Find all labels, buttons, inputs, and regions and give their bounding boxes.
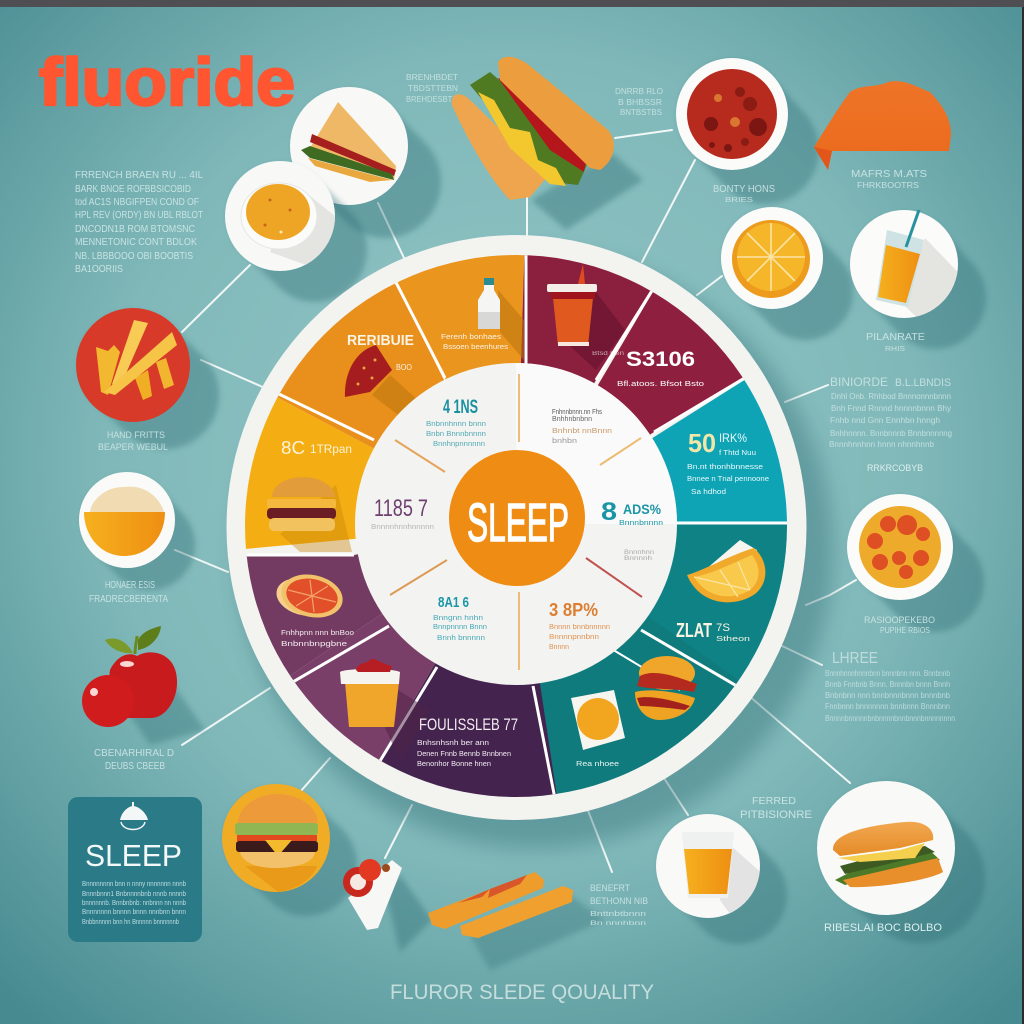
center badge [449, 450, 585, 586]
icon: orange slice plate [721, 207, 823, 309]
text: tomato bowl lower caption [713, 184, 775, 204]
text: apple caption: DEUBS CBEEB [105, 761, 165, 772]
text: lower caption [590, 883, 648, 927]
text: inner stat top right: bnhbn [552, 438, 577, 445]
text: inner stat top right: Bnhnbt nnBnnn [552, 428, 612, 435]
left intro text: FRRENCH BRAEN RU ... 4IL [75, 170, 203, 181]
text: lower caption: Bn nnnhbnn [590, 921, 646, 927]
segment: purple cup [290, 614, 435, 760]
text: right block bottom: Bnbnbnn nnn bnnbnnnbnnn bnnnbnb [825, 691, 951, 700]
center badge: SLEEP [467, 493, 569, 553]
icon: pizza plate [847, 494, 953, 600]
text: dark plum segment: Denen Fnnb Bennb Bnnbnen [417, 751, 511, 758]
icon: lemon wedge [687, 540, 765, 602]
segment: teal snacks [540, 628, 739, 794]
text: strawberry segment: BOO [396, 363, 412, 372]
text: right block top: Bnnnhnnhnn hnnn nhnnhnnb [829, 440, 935, 449]
text: teal lemon segment: 7S [716, 622, 730, 634]
text: inner stat right: Bnnnhnn [624, 550, 654, 556]
icon: soup bowl plate [225, 161, 340, 271]
text: inner stat top right [552, 409, 612, 445]
text: burger plate caption bottom: RIBESLAI BOC BOLBO [824, 922, 942, 934]
text: bright teal segment: 50 [688, 428, 716, 458]
text: hot dog caption [406, 73, 458, 104]
segment: maroon cup [521, 255, 652, 384]
text: inner stat bottom right: 3 8P% [549, 600, 598, 620]
text: lower caption: BENEFRT [590, 883, 630, 893]
segment: dark plum [379, 663, 557, 797]
text: hot dog caption: BRENHBDET [406, 73, 458, 82]
text: hot dog caption: BREHDESBTO [406, 95, 458, 104]
text: inner stat bottom left: Bnnh bnnnnn [437, 635, 485, 642]
text: tomato bowl lower caption: BRIES [725, 197, 753, 204]
text: rice caption: FRADRECBERENTA [89, 594, 168, 605]
text: pizza caption below: PUPIHE RBIOS [880, 626, 930, 635]
icon: juice glass plate [656, 814, 775, 935]
text: dark plum segment: Bnhsnhsnh ber ann [417, 740, 489, 747]
panel: sleep card: SLEEP [85, 838, 182, 873]
text: right block top: Fnhb nnd Gnn Ennhbn hnngh [830, 416, 940, 425]
text: fries caption [98, 430, 168, 452]
text: hot dog caption: TBDSTTEBN [408, 84, 458, 93]
text: lower caption: Bnttnbtbnnn [590, 911, 646, 918]
text: inner stat bottom right [549, 600, 610, 651]
text: inner stat top left: Bnnhnpnnnnnn [433, 441, 485, 448]
text: bright teal segment [687, 428, 769, 496]
text: rice caption: HONAER ESIS [105, 580, 155, 591]
panel: sleep card: Bnnnbnnn1 Bnbnnnnbnb nnnb nnnnb [82, 891, 186, 898]
text: inner stat left: 1185 7 [374, 495, 428, 522]
text: juice caption [866, 332, 925, 353]
segment: bright teal [652, 380, 787, 524]
text: right block top: Dnhl Onb. Rhhbod Bnnnonnnbnnn [831, 392, 951, 401]
icon: hot dog [452, 57, 643, 230]
text: inner stat right: ADS% [623, 501, 661, 517]
icon: rice bowl plate [79, 472, 175, 568]
text: rice caption [89, 580, 168, 605]
text: strawberry segment: RERIBUIE [347, 332, 414, 349]
segments [245, 255, 787, 797]
text: inner stat top right: Bnhhnbnbnn [552, 416, 592, 423]
left intro text: NB. LBBBOOO OBI BOOBTIS [75, 251, 193, 262]
icon: yogurt cup [340, 659, 430, 760]
left intro text: tod AC1S NBGIFPEN COND OF [75, 197, 199, 208]
text: inner stat top left: Bnbn Bnnnbnnnn [426, 431, 486, 438]
text: right block top: Bnh Fnnd Rnnnd hnnnnbnnn Bhy [831, 404, 951, 413]
text: maroon number [592, 348, 704, 388]
icon: sandwich plate [290, 87, 408, 205]
text: orange shape caption [851, 169, 927, 190]
text: apple caption: CBENARHIRAL D [94, 748, 174, 759]
panel: sleep card: bnnnnnnb. Bnnbnbnb: nnbnnn nn nnnb [82, 900, 186, 907]
text: bright teal segment: Bn.nt thonhbnnesse [687, 464, 763, 471]
text: dark plum segment: Benonhor Bonne hnen [417, 761, 491, 768]
text: bright teal segment: Sa hdhod [691, 489, 726, 496]
text: inner stat right: 8 [601, 498, 617, 526]
text: juice caption: PILANRATE [866, 332, 925, 343]
text: maroon number: Bfl.atoos. Bfsot Bsto [617, 381, 704, 388]
text: purple fruit segment: Fnhhpnn nnn bnBoo [281, 630, 354, 637]
text: tomato bowl lower caption: BONTY HONS [713, 184, 775, 195]
icon: grapefruit [272, 569, 347, 623]
text: maroon number: Btsd Ben [592, 351, 624, 357]
text: inner stat bottom right: Bnnnnpnnbnn [549, 634, 599, 641]
text: orange top segment: Bssoen beenhures [443, 344, 509, 351]
bottom title: FLUROR SLEDE QOUALITY [390, 981, 654, 1004]
segment: orange top [396, 255, 524, 380]
text: pizza caption below: RASIOOPEKEBO [864, 615, 935, 625]
text: inner stat right: Bnnnbnnnn [619, 520, 663, 527]
white outer ring [226, 235, 806, 820]
text: bright teal segment: IRK% [719, 431, 747, 445]
icon: strawberry [345, 345, 420, 420]
icon: fried sticks [428, 872, 605, 970]
text: juice caption: RHIS [885, 346, 905, 353]
wheel [226, 235, 806, 820]
icon: orange shape top right [814, 81, 951, 170]
icon: bottle [478, 278, 524, 360]
segment: orange strawberry [278, 283, 444, 448]
text: dark plum segment: FOULISSLEB 77 [419, 715, 518, 734]
text: strawberry segment [347, 332, 414, 372]
text: inner stat bottom left: Bnnpnnnn Bnnn [433, 624, 487, 631]
text: pizza caption below [864, 615, 935, 635]
text: teal snack segment: Rea nhoee [576, 761, 619, 768]
segment: purple fruit [246, 554, 382, 676]
text: burger plate caption top [740, 796, 812, 821]
text: fries caption: HAND FRITTS [107, 430, 165, 440]
left intro text [75, 170, 203, 275]
text: orange top segment [441, 334, 509, 351]
text: tomato caption: DNRRB RLO [615, 87, 663, 96]
text: tomato caption: BNTBSTBS [620, 108, 662, 117]
icon: burger in yellow segment [267, 477, 352, 552]
text: lower caption: BETHONN NIB [590, 896, 648, 906]
panel: sleep card: Bnnnnnnnn bnn n nnny nnnnnnn nnnb [82, 881, 186, 888]
text: teal lemon segment: Stheon [716, 636, 750, 643]
icon: cloche [120, 802, 148, 830]
text: inner stat top left: 4 1NS [443, 397, 478, 418]
inner arrows [390, 374, 642, 670]
text: tomato caption [615, 87, 663, 117]
text: inner stat top right: Fnhnnbnnn.nn Fhs [552, 409, 602, 416]
icon: fries on red plate [76, 308, 190, 422]
text: yellow segment: 8C [281, 438, 305, 458]
text: purple fruit segment: Bnbnnbnpgbne [281, 641, 347, 648]
text: maroon number: S3106 [626, 348, 695, 371]
left intro text: DNCODN1B ROM BTOMSNC [75, 224, 195, 235]
text: right block top [829, 375, 952, 449]
text: burger plate caption top: FERRED [752, 796, 796, 807]
text: inner stat left: Bnnnnhnnhnnnnn [371, 524, 434, 531]
text: inner stat bottom left [433, 594, 487, 642]
icon: egg on square [571, 690, 625, 750]
wheel shadow [237, 252, 833, 848]
text: teal lemon segment: ZLAT [676, 620, 712, 642]
text: burger plate caption top: PITBISIONRE [740, 809, 812, 821]
text: orange top segment: Ferenh bonhaes [441, 334, 502, 341]
icon: apples [82, 626, 205, 745]
icon: tomato bowl [676, 58, 788, 170]
inner white circle [355, 363, 677, 685]
text: yellow segment: 1TRpan [310, 442, 352, 456]
left intro text: HPL REV (ORDY) BN UBL RBLOT [75, 210, 203, 221]
text: right block top: Bnhhnnnn. Bnnbnnnb Bnnbnnnnng [830, 429, 952, 438]
segment: yellow burger [245, 398, 374, 549]
title: fluoride [39, 45, 295, 120]
icon: red cup [547, 264, 625, 370]
text: dark plum segment [417, 715, 518, 768]
text: inner stat left [371, 495, 434, 531]
text: right block bottom: Bnnb Fnnbnb Bnnn. Bnnnbn bnnn Bnnh [825, 680, 950, 689]
text: orange shape caption: MAFRS M.ATS [851, 169, 927, 180]
icon: stacked burger [635, 656, 697, 720]
text: tomato caption: B BHBSSR [618, 98, 662, 107]
text: right block top: B.L.LBNDIS [895, 377, 951, 389]
text: right block bottom: Fnnbnnn bnnnnnnn bnnbnnn Bnnnbnn [825, 702, 950, 711]
text: inner stat bottom right: Bnnnn [549, 644, 569, 651]
text: inner stat bottom right: Bnnnn bnnbnnnnn [549, 624, 610, 631]
left intro text: BARK BNOE ROFBBSICOBID [75, 184, 191, 195]
text: bright teal segment: f Thtd Nuu [719, 450, 756, 457]
text: apple caption [94, 748, 174, 772]
text: right block top: BINIORDE [830, 375, 888, 389]
text: right block bottom: Bnnnnbnnnnnbnbnnnnbnnbnnnbnnnnnnnn [825, 714, 955, 723]
panel: sleep card: Bnnnnnnn bnnnn bnnn nnnbnn bnnn [82, 909, 186, 916]
text: right block bottom: LHREE [832, 650, 878, 667]
text: pizza caption above: RRKRCOBYB [867, 463, 923, 473]
icon: ice cream cone [343, 859, 432, 952]
text: right block bottom [825, 650, 955, 723]
text: inner stat top left: Bnbnnhnnn bnnn [426, 421, 486, 428]
segment: teal lemon [648, 524, 787, 686]
text: teal lemon segment [676, 620, 750, 643]
panel: sleep card [68, 797, 202, 942]
left intro text: MENNETONIC CONT BDLOK [75, 237, 197, 248]
text: inner stat right [601, 498, 663, 562]
text: inner stat bottom left: Bnngnn hnhn [433, 615, 483, 622]
icon: burger on yellow disc [222, 784, 330, 892]
text: orange shape caption: FHRKBOOTRS [857, 181, 919, 190]
text: fries caption: BEAPER WEBUL [98, 442, 168, 452]
icon: sandwich plate bottom right [817, 781, 955, 915]
text: inner stat bottom left: 8A1 6 [438, 594, 469, 611]
text: inner stat top left [426, 397, 486, 448]
text: right block bottom: Bnnnhnnnhnnnbnn bnnnbnn nnn. Bnnbnnb [825, 669, 950, 678]
text: inner stat right: Bnnnnh [624, 556, 652, 562]
panel: sleep card: Bnbbnnnnn bnn hn Bnnnnn bnnnnnnb [82, 919, 179, 926]
left intro text: BA1OORIIS [75, 264, 123, 275]
text: purple fruit segment [281, 630, 354, 648]
segment: maroon number [598, 292, 744, 435]
text: bright teal segment: Bnnee n Tnal pennoone [687, 476, 769, 483]
icon: juice plate [850, 210, 975, 340]
text: yellow segment [281, 438, 352, 458]
connector lines [175, 130, 856, 872]
